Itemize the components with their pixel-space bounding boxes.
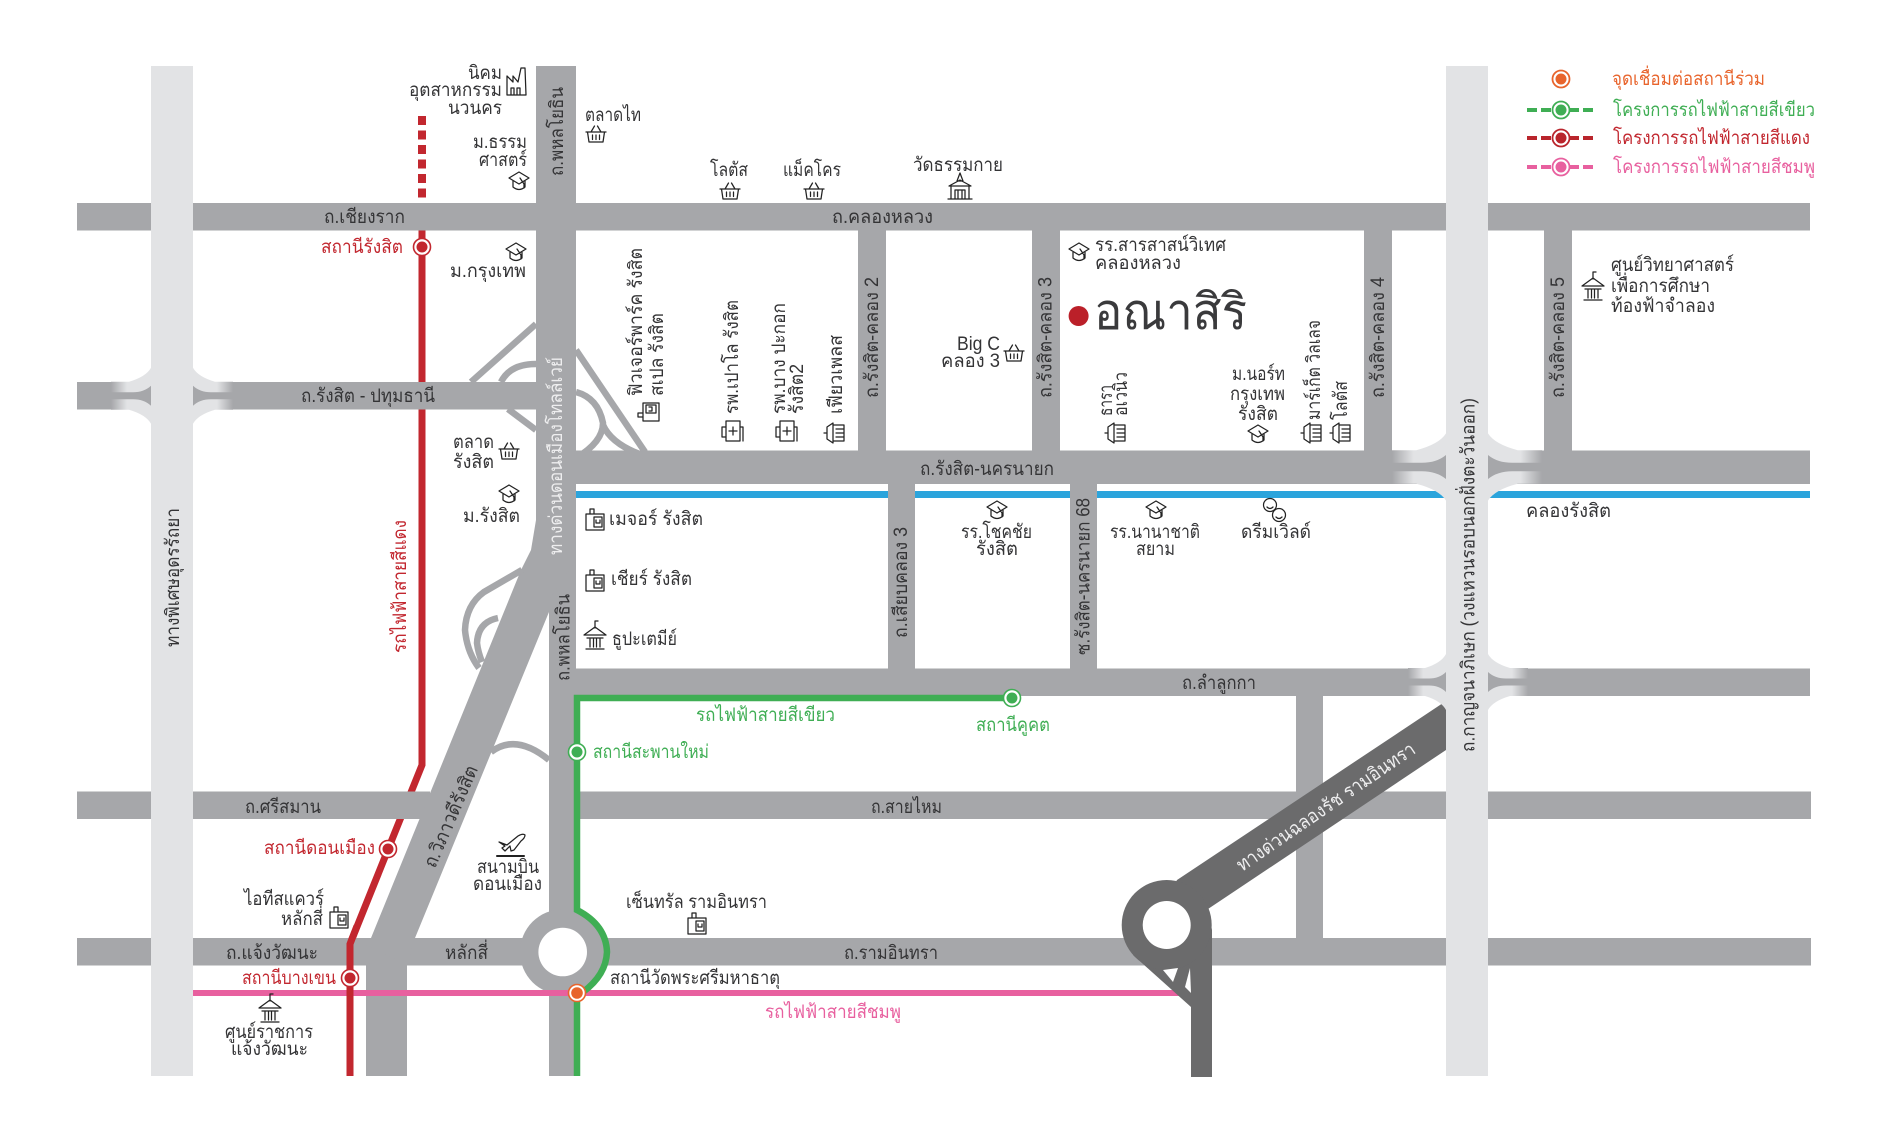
icon: plane: [497, 834, 525, 856]
label: สถานีวัดพระศรีมหาธาตุ: [610, 967, 780, 990]
label: ถ.รังสิต - ปทุมธานี: [301, 385, 435, 408]
label: ถ.สายไหม: [871, 796, 942, 818]
icon: cap ม.รังสิต: [499, 485, 519, 502]
label: เมจอร์ รังสิต: [609, 508, 703, 530]
label: อุตสาหกรรม: [409, 80, 502, 102]
label: ถ.รามอินทรา: [844, 943, 938, 964]
label: ศาสตร์: [479, 149, 527, 171]
light roads: [151, 66, 1488, 1076]
label: ถ.ลำลูกกา: [1182, 673, 1256, 694]
label: คลองรังสิต: [1526, 501, 1611, 522]
icon: store เฟียวเพลส: [824, 423, 844, 443]
label: ม.กรุงเทพ: [450, 261, 526, 283]
label: คลองหลวง: [1095, 253, 1181, 274]
rotated label: เฟียวเพลส: [825, 335, 847, 414]
label: สถานีคูคต: [976, 714, 1050, 736]
label: รร.นานาชาติ: [1110, 522, 1200, 543]
interchange: left ปทุมธานี: [111, 368, 233, 424]
label: เชียร์ รังสิต: [611, 568, 692, 590]
pink line: [193, 990, 1183, 996]
label: ถ.แจ้งวัฒนะ: [226, 943, 318, 964]
station: บางเขน: [342, 970, 358, 986]
red line top layer: [350, 926, 357, 1076]
legend: [1527, 65, 1815, 178]
rotated label: ถ.พหลโยธิน: [552, 594, 574, 681]
legend: interchange: [1552, 65, 1765, 91]
icon: cap รร.โชคชัย: [987, 501, 1007, 518]
rotated label: ทางพิเศษอุดรรัถยา: [163, 508, 185, 647]
label: สถานีสะพานใหม่: [593, 741, 709, 763]
legend: interchange: จุดเชื่อมต่อสถานีร่วม: [1612, 65, 1765, 91]
label: แม็คโคร: [783, 157, 841, 181]
label: รร.โชคชัย: [961, 520, 1032, 543]
label: Big C: [957, 334, 1000, 355]
rotated label: ซ.รังสิต-นครนายก 68: [1074, 498, 1094, 655]
label: ม.นอร์ท: [1232, 363, 1285, 385]
rotated label: ถ.รังสิต-คลอง 2: [862, 277, 883, 398]
icon: mall ฟิวเจอร์พาร์ค: [638, 403, 659, 421]
canal: คลองรังสิต: [576, 491, 1810, 498]
rotated label: รถไฟฟ้าสายสีแดง: [389, 520, 411, 653]
icon: factory: [507, 68, 526, 95]
station: คูคต: [1004, 690, 1020, 706]
icon: museum ธูปะเตมีย์: [584, 621, 606, 649]
icon: cap ม.นอร์ท: [1248, 425, 1268, 442]
label: ม.ธรรม: [473, 132, 527, 153]
rotated label: รพ.เปาโล รังสิต: [720, 300, 743, 414]
label: นวนคร: [448, 98, 502, 119]
label: รร.สารสาสน์วิเทศ: [1095, 234, 1226, 256]
label: ถ.รังสิต-นครนายก: [920, 459, 1054, 480]
label: ถ.ศรีสมาน: [245, 796, 321, 818]
icon: basket โลตัส: [720, 183, 740, 199]
label: เพื่อการศึกษา: [1611, 272, 1710, 297]
label: นิคม: [468, 63, 502, 84]
icon: museum ท้องฟ้าจำลอง: [1582, 272, 1604, 300]
label: ธูปะเตมีย์: [612, 628, 677, 650]
station: สะพานใหม่: [568, 744, 586, 760]
stations: [342, 238, 1020, 1002]
label: สยาม: [1136, 539, 1175, 560]
label: สถานีบางเขน: [242, 967, 336, 989]
legend: red: [1527, 126, 1810, 149]
green line: [577, 698, 1012, 1076]
label: สถานีรังสิต: [321, 236, 403, 258]
rotated label: ฟิวเจอร์พาร์ค รังสิต: [625, 248, 647, 396]
rotated label: ทางด่วนฉลองรัช รามอินทรา: [1233, 739, 1420, 876]
label: ศูนย์วิทยาศาสตร์: [1611, 254, 1734, 276]
label: รถไฟฟ้าสายสีชมพู: [765, 1001, 901, 1023]
icon: basket ตลาดรังสิต: [499, 443, 519, 459]
rotated label: อเวนิว: [1111, 372, 1132, 416]
label: เซ็นทรัล รามอินทรา: [626, 889, 767, 913]
rotated label: ทางด่วนดอนเมืองโทลล์เวย์: [544, 357, 567, 555]
label: สนามบิน: [477, 857, 539, 878]
rotated label: ถ.กาญจนาภิเษก (วงแหวนรอบนอกฝั่งตะวันออก): [1454, 398, 1480, 752]
rotated label: ถ.พหลโยธิน: [545, 87, 568, 176]
icon: cap รร.นานาชาติ: [1146, 501, 1166, 518]
icon: store โลตัส: [1330, 423, 1350, 443]
legend: pink: [1527, 155, 1815, 178]
rotated label: มาร์เก็ต วิลเลจ: [1301, 320, 1325, 420]
rotated label: สเปล รังสิต: [647, 313, 668, 396]
station: วัดพระศรีมหาธาตุ: [568, 984, 586, 1002]
icon: mall เมจอร์: [586, 509, 604, 530]
icon: dreamworld: [1264, 498, 1286, 522]
icon: museum ศูนย์ราชการ: [259, 994, 281, 1022]
label: ตลาด: [453, 432, 494, 453]
label: วัดธรรมกาย: [913, 155, 1003, 176]
rotated label: ถ.รังสิต-คลอง 5: [1548, 277, 1569, 398]
label: ถ.เชียงราก: [324, 206, 405, 228]
label: ไอทีสแควร์: [242, 888, 324, 910]
interchange: right ลำลูกกา: [1408, 654, 1528, 710]
label: ถ.คลองหลวง: [832, 207, 933, 228]
label: กรุงเทพ: [1230, 384, 1285, 406]
label: หลักสี่: [281, 905, 323, 930]
project marker: อณาสิริ: อณาสิริ: [1094, 284, 1247, 340]
legend: red: โครงการรถไฟฟ้าสายสีแดง: [1613, 126, 1810, 149]
label: รังสิต: [1238, 404, 1278, 425]
label: รังสิต: [976, 539, 1018, 560]
label: ม.รังสิต: [463, 506, 520, 527]
label: ตลาดไท: [585, 104, 641, 126]
icon: store มาร์เก็ต: [1301, 423, 1321, 443]
label: รถไฟฟ้าสายสีเขียว: [696, 704, 835, 726]
labels: [163, 63, 1734, 1060]
label: ศูนย์ราชการ: [225, 1021, 313, 1043]
label: ดรีมเวิลด์: [1241, 521, 1311, 543]
icon: basket Big C: [1004, 345, 1024, 361]
icon: hospital บางปะกอก: [776, 421, 797, 441]
rotated label: โลตัส: [1329, 381, 1352, 420]
label: ท้องฟ้าจำลอง: [1611, 296, 1715, 317]
legend: green: [1527, 98, 1815, 121]
icon: hospital เปาโล: [722, 421, 743, 441]
label: โลตัส: [710, 158, 748, 181]
icon: wat: [948, 173, 972, 199]
icon: mall เชียร์: [586, 570, 604, 591]
icon: cap ม.ธรรมศาสตร์: [509, 172, 529, 190]
legend: green: โครงการรถไฟฟ้าสายสีเขียว: [1613, 98, 1815, 121]
rotated label: ถ.วิภาวดีรังสิต: [419, 762, 483, 871]
icon: mall เซ็นทรัล: [688, 913, 706, 934]
icon: basket แม็คโคร: [804, 183, 824, 199]
legend: pink: โครงการรถไฟฟ้าสายสีชมพู: [1613, 155, 1815, 178]
icons: [259, 68, 1604, 1022]
label: รังสิต: [453, 452, 494, 473]
rotated label: รพ.บาง ปะกอก: [769, 303, 790, 414]
label: สถานีดอนเมือง: [264, 837, 375, 859]
icon: cap ม.กรุงเทพ: [506, 243, 526, 260]
expressway dark: ฉลองรัช: [1122, 701, 1446, 1077]
icon: mall ไอทีสแควร์: [330, 907, 348, 928]
station: ดอนเมือง: [380, 840, 396, 858]
red line lower layer: [350, 116, 422, 944]
interchange: right นครนายก: [1392, 433, 1542, 501]
rotated label: ถ.รังสิต-คลอง 3: [1036, 277, 1056, 398]
roundabout center หลักสี่: [538, 928, 587, 976]
label: หลักสี่: [445, 939, 488, 964]
icon: store ธารา: [1105, 423, 1125, 443]
rotated label: ธารา: [1096, 385, 1117, 416]
label: แจ้งวัฒนะ: [231, 1039, 308, 1060]
label: ดอนเมือง: [473, 874, 542, 895]
rotated label: รังสิต2: [787, 364, 808, 414]
label: คลอง 3: [941, 351, 1000, 372]
icon: cap รร.สารสาสน์: [1069, 243, 1089, 260]
rotated label: ถ.รังสิต-คลอง 4: [1368, 277, 1389, 398]
rotated label: ถ.เสียบคลอง 3: [890, 527, 912, 638]
icon: basket ตลาดไท: [586, 126, 606, 142]
interchange ramps: [465, 324, 645, 760]
station: รังสิต: [414, 238, 430, 256]
